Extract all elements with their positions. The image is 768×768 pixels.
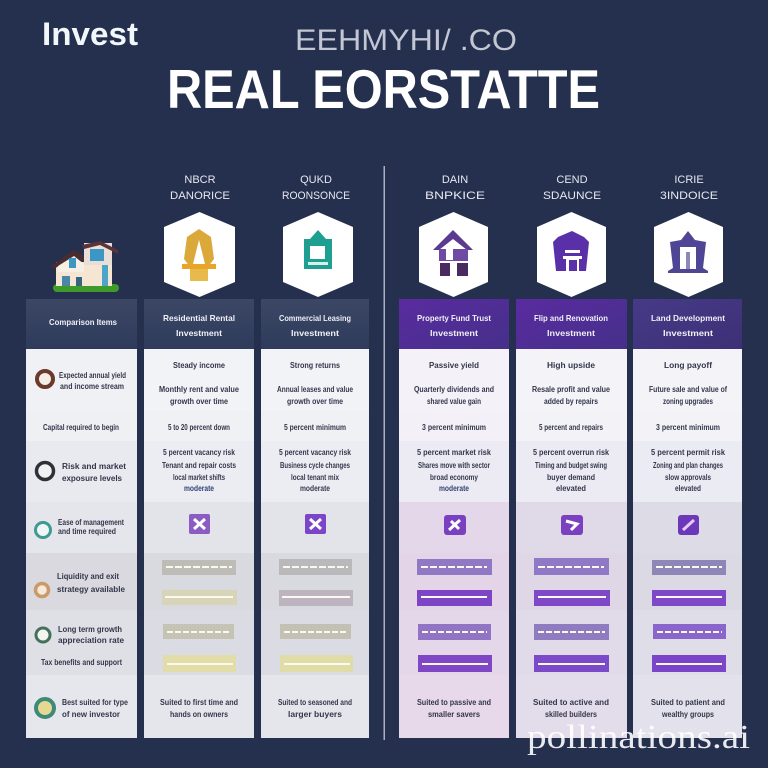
cell text: growth over time — [170, 397, 228, 406]
header row text — [49, 313, 725, 338]
cell text: Suited to first time and — [160, 698, 238, 707]
row icons — [36, 371, 54, 717]
icon: purple hexagon 3 — [654, 212, 723, 297]
column headings: 3INDOICE — [660, 190, 718, 202]
header row text: Investment — [291, 328, 339, 338]
cell text: Tenant and repair costs — [162, 461, 236, 470]
criteria labels: Tax benefits and support — [41, 658, 122, 667]
cell text: Resale profit and value — [532, 385, 610, 394]
column 5 — [516, 299, 627, 738]
cell text: Quarterly dividends and — [414, 385, 494, 394]
cell text: broad economy — [430, 473, 478, 482]
criteria labels: Risk and market — [62, 462, 126, 471]
cell text: zoning upgrades — [663, 397, 713, 406]
header row text: Comparison Items — [49, 317, 117, 327]
column headings: QUKD — [300, 174, 332, 186]
criteria labels: Capital required to begin — [43, 423, 119, 432]
cell text: wealthy groups — [661, 710, 714, 719]
criteria labels: appreciation rate — [58, 636, 125, 645]
rating bars: purple columns — [417, 558, 726, 672]
cell text: 3 percent minimum — [656, 423, 720, 432]
cell text: elevated — [556, 484, 586, 493]
cell text: 5 percent vacancy risk — [163, 448, 235, 457]
icon: gold hexagon — [164, 212, 235, 297]
cell text: local market shifts — [173, 473, 225, 482]
cell text — [159, 361, 727, 719]
icon badges: purple star — [189, 514, 699, 535]
column 2 — [144, 299, 254, 738]
column 4 — [399, 299, 509, 738]
rating bars: neutral columns — [162, 559, 353, 672]
cell text: larger buyers — [288, 710, 343, 719]
cell text: High upside — [547, 361, 596, 370]
column 6 — [633, 299, 742, 738]
header row text: Investment — [547, 328, 595, 338]
icon: purple hexagon 1 — [419, 212, 488, 297]
cell text: 5 percent minimum — [284, 423, 346, 432]
criteria labels: Long term growth — [58, 625, 122, 634]
column headings: BNPKICE — [425, 190, 485, 202]
column 3 — [261, 299, 369, 738]
column headings: DAIN — [442, 174, 468, 186]
criteria labels: and income stream — [60, 382, 124, 391]
cell text: added by repairs — [544, 397, 598, 406]
cell text: Monthly rent and value — [159, 385, 240, 394]
header row text: Land Development — [651, 313, 725, 323]
cell text: moderate — [300, 484, 330, 493]
cell text: Steady income — [173, 361, 226, 370]
header row text: Investment — [663, 328, 713, 338]
icon: house illustration — [51, 241, 119, 292]
icon: purple hexagon 2 — [537, 212, 606, 297]
cell text: Annual leases and value — [277, 385, 353, 394]
cell text: Long payoff — [664, 361, 712, 370]
cell text: buyer demand — [547, 473, 595, 482]
cell text: 5 percent market risk — [417, 448, 491, 457]
cell text: Suited to active and — [533, 698, 609, 707]
criteria labels: strategy available — [57, 585, 126, 594]
header row text: Residential Rental — [163, 313, 235, 323]
cell text: Strong returns — [290, 361, 340, 370]
criteria labels: Best suited for type — [62, 698, 128, 707]
cell text: moderate — [184, 484, 214, 493]
watermark: pollinations.ai — [527, 719, 750, 756]
criteria labels: exposure levels — [62, 474, 123, 483]
cell text: slow approvals — [665, 473, 711, 482]
cell text: elevated — [675, 484, 701, 493]
cell text: smaller savers — [428, 710, 481, 719]
column: criteria — [26, 299, 137, 738]
logo: Invest: Invest — [42, 16, 138, 52]
cell text: Business cycle changes — [280, 461, 350, 470]
column headings — [170, 174, 718, 202]
cell text: 3 percent minimum — [422, 423, 486, 432]
cell text: local tenant mix — [291, 473, 339, 482]
cell text: Future sale and value of — [649, 385, 727, 394]
header row text: Investment — [430, 328, 478, 338]
column headings: NBCR — [184, 174, 216, 186]
cell text: 5 to 20 percent down — [168, 423, 230, 432]
title: REAL EORSTATTE — [167, 58, 600, 120]
header row text: Flip and Renovation — [534, 313, 608, 323]
cell text: Suited to passive and — [417, 698, 491, 707]
table: comparison columns — [26, 299, 742, 738]
cell text: moderate — [439, 484, 469, 493]
cell text: Shares move with sector — [418, 461, 490, 470]
criteria labels: Expected annual yield — [59, 371, 126, 380]
criteria labels — [41, 371, 128, 719]
criteria labels: and time required — [58, 527, 116, 536]
criteria labels: Ease of management — [58, 518, 124, 527]
criteria labels: of new investor — [62, 710, 120, 719]
cell text: Timing and budget swing — [535, 461, 607, 470]
column headings: ROONSONCE — [282, 190, 350, 202]
cell text: 5 percent vacancy risk — [279, 448, 351, 457]
icon: teal hexagon — [283, 212, 353, 297]
cell text: hands on owners — [170, 710, 228, 719]
header row text: Property Fund Trust — [417, 313, 491, 323]
column headings: CEND — [556, 174, 588, 186]
cell text: shared value gain — [427, 397, 481, 406]
cell text: Suited to seasoned and — [278, 698, 352, 707]
cell text: Zoning and plan changes — [653, 461, 723, 470]
cell text: 5 percent overrun risk — [533, 448, 609, 457]
column headings: ICRIE — [674, 174, 704, 186]
column headings: DANORICE — [170, 190, 230, 202]
vertical divider — [384, 166, 385, 740]
cell text: Suited to patient and — [651, 698, 725, 707]
column headings: SDAUNCE — [543, 190, 601, 202]
header row text: Commercial Leasing — [279, 313, 351, 323]
criteria labels: Liquidity and exit — [57, 572, 119, 581]
header row text: Investment — [176, 328, 222, 338]
subtitle: EEHMYHI/ .CO — [295, 24, 517, 57]
cell text: 5 percent and repairs — [539, 423, 603, 432]
cell text: Passive yield — [429, 361, 479, 370]
cell text: skilled builders — [545, 710, 597, 719]
cell text: growth over time — [287, 397, 343, 406]
cell text: 5 percent permit risk — [651, 448, 726, 457]
